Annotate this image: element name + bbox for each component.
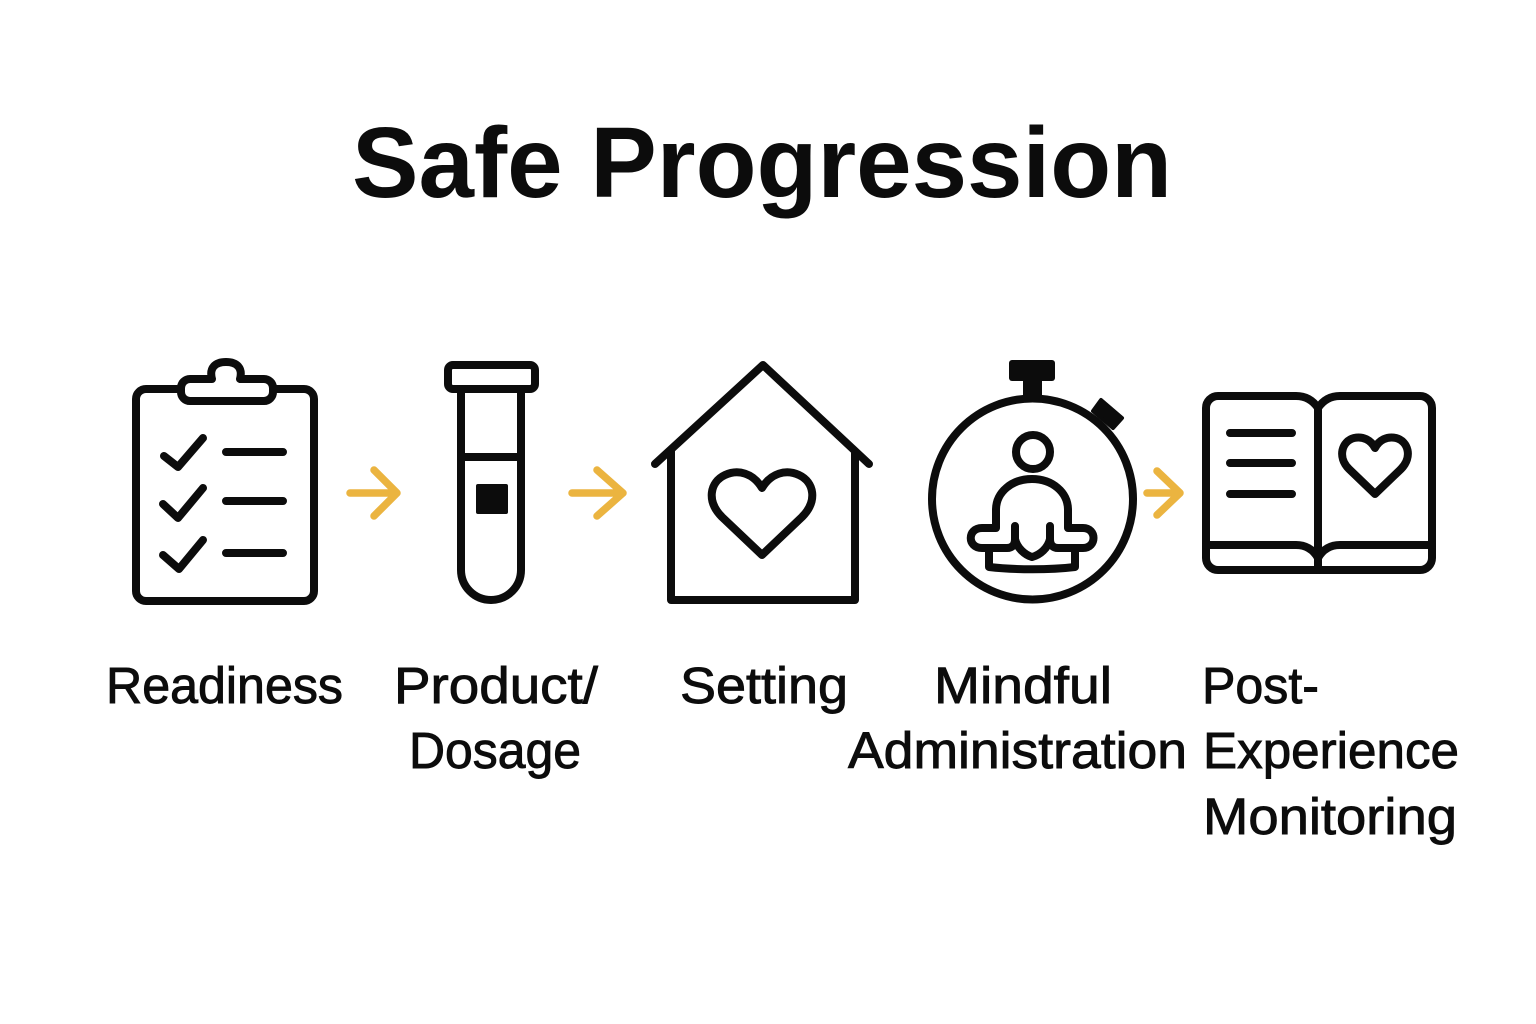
- label: Readiness: Readiness: [106, 657, 343, 714]
- label: Mindful Administration: Mindful: [934, 657, 1112, 714]
- icon: stopwatch with meditating figure: [932, 360, 1133, 600]
- arrow: product to setting: [572, 470, 623, 516]
- label: Mindful Administration: [848, 657, 1187, 779]
- label: Product/Dosage: [394, 657, 599, 779]
- icon: clipboard checklist: [136, 362, 314, 601]
- label: Post-Experience Monitoring: [1202, 657, 1459, 845]
- label: Setting: Setting: [680, 657, 848, 714]
- label: Post-Experience Monitoring: Post-: [1202, 657, 1319, 714]
- label: Mindful Administration: Administration: [848, 722, 1187, 779]
- icon: test tube: [448, 365, 535, 600]
- icon: house with heart: [655, 365, 869, 600]
- arrow: administration to monitoring: [1147, 471, 1180, 515]
- icon: open book with heart: [1206, 396, 1432, 570]
- label: Post-Experience Monitoring: Experience: [1203, 722, 1459, 779]
- label: Product/Dosage: Dosage: [409, 722, 581, 779]
- label: Post-Experience Monitoring: Monitoring: [1203, 788, 1457, 845]
- arrow: readiness to product: [350, 470, 397, 516]
- label: Product/Dosage: Product/: [394, 657, 599, 714]
- title: Safe Progression: [352, 107, 1172, 219]
